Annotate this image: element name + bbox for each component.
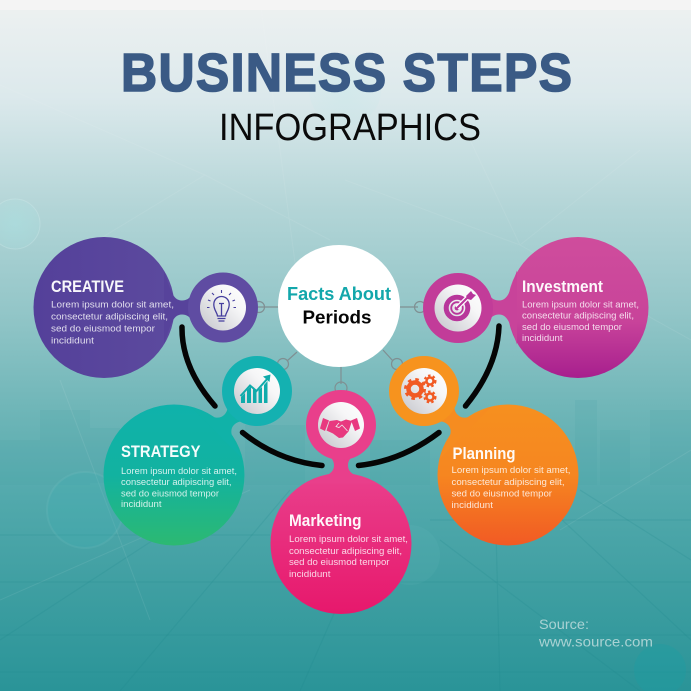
creative body text xyxy=(51,300,174,346)
marketing body text: sed do eiusmod tempor xyxy=(289,557,390,568)
marketing heading: Marketing xyxy=(289,512,362,530)
investment heading: Investment xyxy=(522,278,603,296)
marketing body text: incididunt xyxy=(289,569,331,580)
creative body text: sed do eiusmod tempor xyxy=(51,324,156,334)
central heading: Facts About xyxy=(287,284,391,304)
panel: creative xyxy=(34,237,258,378)
strategy body text: consectetur adipiscing elit, xyxy=(121,477,232,488)
creative heading: CREATIVE xyxy=(51,278,124,296)
source note xyxy=(538,616,653,650)
planning body text: Lorem ipsum dolor sit amet, xyxy=(452,465,570,476)
panel: strategy xyxy=(104,356,292,546)
icon: light bulb xyxy=(200,284,246,330)
investment body text: Lorem ipsum dolor sit amet, xyxy=(522,300,639,310)
strategy body text: sed do eiusmod tempor xyxy=(121,488,220,500)
panel: marketing xyxy=(270,390,412,614)
icon: growth chart xyxy=(234,368,280,414)
marketing body text: Lorem ipsum dolor sit amet, xyxy=(289,534,408,545)
panel: planning xyxy=(389,356,578,546)
investment body text: incididunt xyxy=(522,333,563,344)
investment body text: consectetur adipiscing elit, xyxy=(522,310,634,322)
planning body text: consectetur adipiscing elit, xyxy=(452,477,564,488)
subtitle: INFOGRAPHICS xyxy=(219,107,481,149)
marketing body text xyxy=(289,534,408,580)
creative body text: consectetur adipiscing elit, xyxy=(51,312,168,322)
title: BUSINESS STEPS xyxy=(121,42,572,102)
icon: gears xyxy=(401,368,447,414)
planning body text: sed do eiusmod tempor xyxy=(452,488,553,500)
title xyxy=(121,42,572,149)
strategy body text: Lorem ipsum dolor sit amet, xyxy=(121,466,237,477)
marketing body text: consectetur adipiscing elit, xyxy=(289,546,402,557)
investment body text: sed do eiusmod tempor xyxy=(522,322,623,333)
central subheading: Periods xyxy=(302,308,372,328)
central circle xyxy=(278,245,400,367)
planning body text xyxy=(452,465,570,511)
planning heading: Planning xyxy=(452,445,516,463)
source note: Source: xyxy=(539,616,589,632)
icon: handshake xyxy=(318,402,364,448)
strategy heading: STRATEGY xyxy=(121,443,200,461)
strategy body text xyxy=(121,466,237,510)
creative body text: Lorem ipsum dolor sit amet, xyxy=(51,300,174,310)
connectors xyxy=(254,302,426,394)
panel: investment xyxy=(423,237,648,378)
planning body text: incididunt xyxy=(452,500,493,511)
icon: target xyxy=(434,284,482,332)
investment body text xyxy=(522,300,639,344)
black arcs xyxy=(182,326,499,466)
source note: www.source.com xyxy=(538,634,653,650)
strategy body text: incididunt xyxy=(121,499,162,510)
creative body text: incididunt xyxy=(51,336,94,346)
